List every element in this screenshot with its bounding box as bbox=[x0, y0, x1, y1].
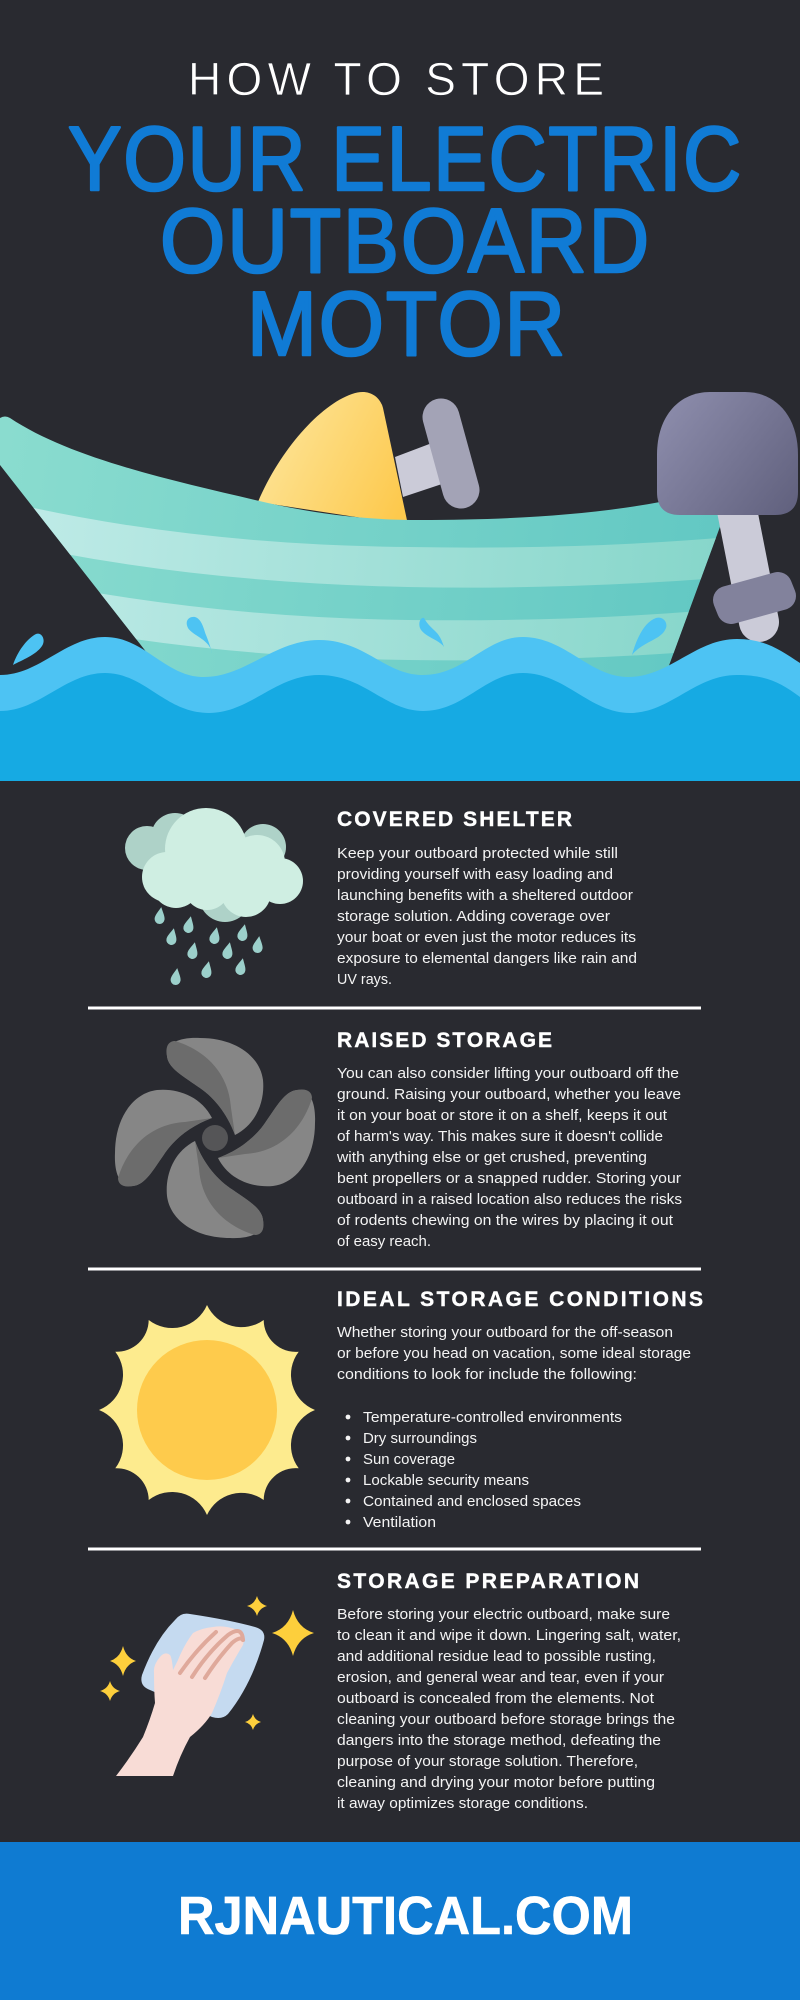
text block: raised storage: You can also consider lifting your outboard off the bbox=[337, 1065, 679, 1082]
panel: storage preparation bbox=[100, 1570, 681, 1812]
bullet list: storage conditions: Lockable security means bbox=[363, 1472, 529, 1489]
illustration: boat with outboard motor on waves bbox=[0, 392, 800, 781]
text block: storage preparation: purpose of your storage solution. Therefore, bbox=[337, 1753, 638, 1770]
footer banner bbox=[0, 1842, 800, 2000]
back wave bbox=[0, 637, 800, 781]
icon: sun bbox=[99, 1305, 315, 1515]
heading: raised storage: RAISED STORAGE bbox=[337, 1029, 552, 1052]
text block: covered shelter: UV rays. bbox=[337, 971, 392, 988]
heading: covered shelter: COVERED SHELTER bbox=[337, 808, 572, 831]
text block: storage preparation: cleaning your outboard before storage brings the bbox=[337, 1711, 675, 1728]
text block: covered shelter: providing yourself with easy loading and bbox=[337, 866, 613, 883]
text block: raised storage: outboard in a raised location also reduces the risks bbox=[337, 1191, 682, 1208]
text block: storage preparation: Before storing your electric outboard, make sure bbox=[337, 1606, 670, 1623]
title bbox=[68, 53, 743, 375]
text block: raised storage bbox=[336, 1065, 682, 1250]
bullet list: storage conditions: Contained and enclosed spaces bbox=[363, 1493, 581, 1510]
icon: tiller bbox=[395, 417, 461, 497]
icon: rain cloud bbox=[125, 808, 303, 986]
heading: ideal storage conditions: IDEAL STORAGE CONDITIONS bbox=[337, 1288, 703, 1311]
icon: propeller bbox=[115, 1038, 315, 1238]
text block: raised storage: of rodents chewing on the wires by placing it out bbox=[337, 1212, 674, 1229]
text block: raised storage: bent propellers or a snapped rudder. Storing your bbox=[337, 1170, 681, 1187]
text block: storage preparation: to clean it and wipe it down. Lingering salt, water, bbox=[337, 1627, 681, 1644]
text block: storage preparation bbox=[337, 1606, 681, 1812]
bullet list: storage conditions: Temperature-controlled environments bbox=[363, 1409, 622, 1426]
title line 3: MOTOR bbox=[247, 274, 567, 375]
panel: raised storage bbox=[115, 1029, 682, 1250]
text block: covered shelter: exposure to elemental dangers like rain and bbox=[337, 950, 637, 967]
panel: covered shelter bbox=[125, 808, 637, 988]
text block: ideal storage intro: Whether storing your outboard for the off-season bbox=[337, 1324, 673, 1341]
front wave bbox=[0, 673, 800, 781]
text block: storage preparation: dangers into the storage method, defeating the bbox=[337, 1732, 661, 1749]
bullet list: storage conditions: Dry surroundings bbox=[363, 1430, 477, 1447]
title line 2: OUTBOARD bbox=[160, 191, 651, 292]
bullet list: storage conditions bbox=[346, 1409, 622, 1531]
icon: outboard motor bbox=[657, 392, 798, 622]
text block: ideal storage intro bbox=[337, 1324, 691, 1383]
bullet list: storage conditions: Sun coverage bbox=[363, 1451, 455, 1468]
text block: raised storage: with anything else or get crushed, preventing bbox=[336, 1149, 647, 1166]
text block: covered shelter bbox=[337, 845, 637, 988]
text block: raised storage: it on your boat or store it on a shelf, keeps it out bbox=[337, 1107, 668, 1124]
footer url: RJNAUTICAL.COM bbox=[178, 1886, 633, 1946]
text block: raised storage: ground. Raising your outboard, whether you leave bbox=[337, 1086, 681, 1103]
text block: raised storage: of easy reach. bbox=[337, 1233, 431, 1250]
text block: storage preparation: and additional residue lead to possible rusting, bbox=[337, 1648, 656, 1665]
text block: ideal storage intro: or before you head on vacation, some ideal storage bbox=[337, 1345, 691, 1362]
text block: covered shelter: Keep your outboard protected while still bbox=[337, 845, 618, 862]
icon: water splashes bbox=[13, 617, 666, 665]
panel: ideal storage conditions bbox=[99, 1288, 703, 1531]
text block: covered shelter: storage solution. Adding coverage over bbox=[337, 908, 610, 925]
text block: covered shelter: launching benefits with a sheltered outdoor bbox=[337, 887, 633, 904]
text block: storage preparation: erosion, and general wear and tear, even if your bbox=[337, 1669, 664, 1686]
icon: hand wiping with cloth and sparkles bbox=[100, 1596, 314, 1776]
text block: raised storage: of harm's way. This makes sure it doesn't collide bbox=[337, 1128, 663, 1145]
icon: yellow sail bbox=[258, 392, 408, 525]
text block: storage preparation: outboard is concealed from the elements. Not bbox=[337, 1690, 655, 1707]
text block: covered shelter: your boat or even just the motor reduces its bbox=[337, 929, 636, 946]
heading: storage preparation: STORAGE PREPARATION bbox=[337, 1570, 639, 1593]
text block: storage preparation: cleaning and drying your motor before putting bbox=[337, 1774, 655, 1791]
text block: ideal storage intro: conditions to look for include the following: bbox=[337, 1366, 637, 1383]
bullet list: storage conditions: Ventilation bbox=[363, 1514, 436, 1531]
subtitle: how to store: HOW TO STORE bbox=[188, 53, 604, 105]
icon: boat hull bbox=[0, 416, 720, 677]
text block: storage preparation: it away optimizes storage conditions. bbox=[337, 1795, 588, 1812]
